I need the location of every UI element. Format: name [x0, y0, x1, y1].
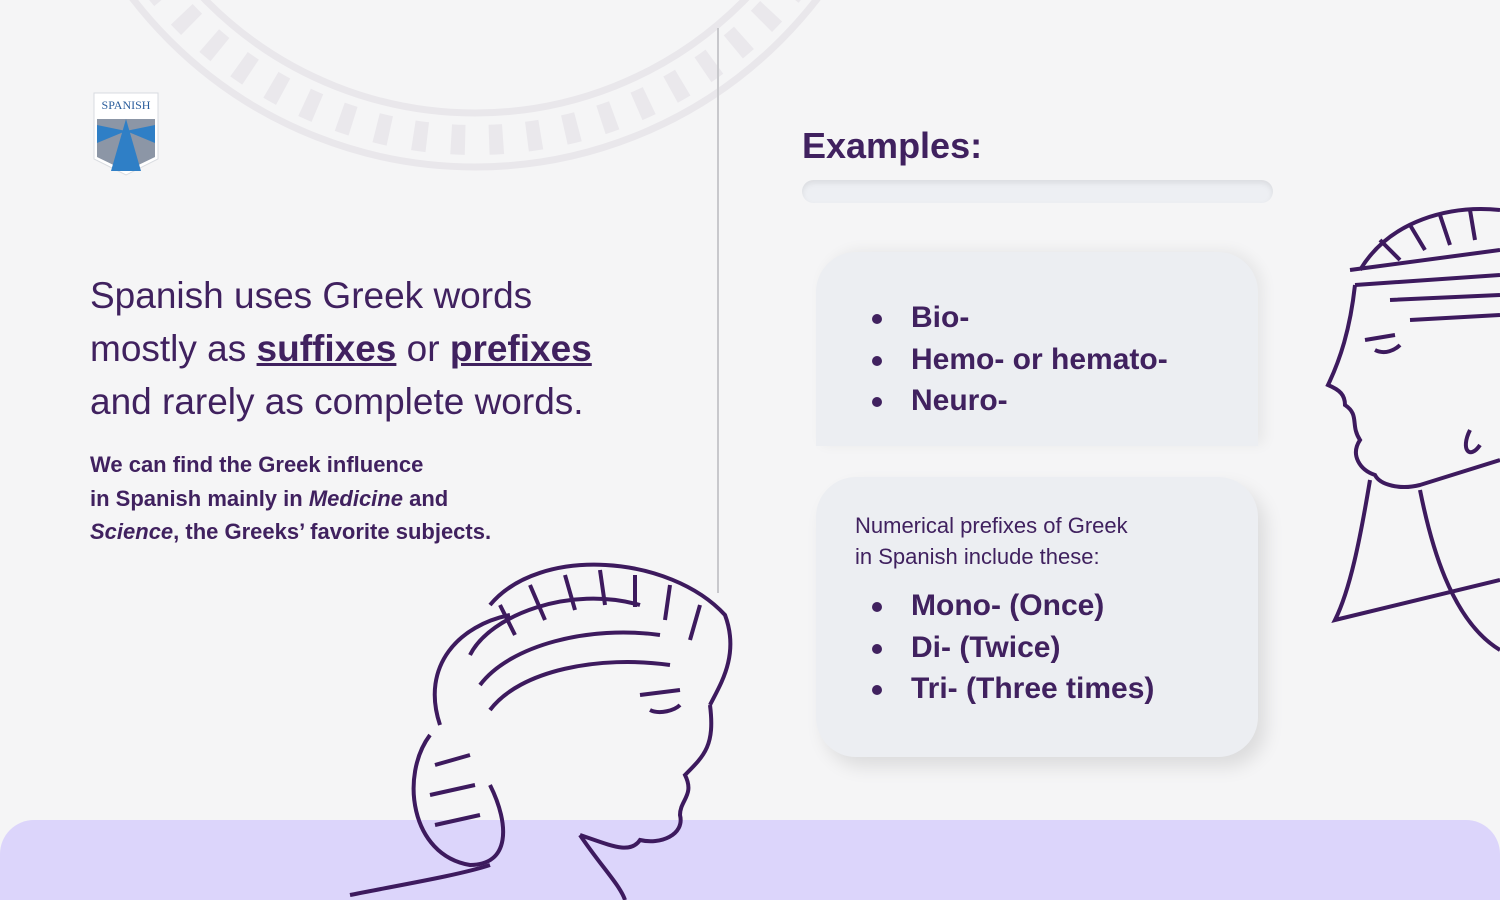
card: numerical prefixes: [816, 477, 1258, 757]
illustration: bust bottom: [350, 562, 732, 900]
main heading: mostly as suffixes or prefixes: [90, 328, 592, 369]
main heading: [90, 275, 592, 422]
card: examples list: Neuro-: [911, 384, 1008, 417]
subtext: We can find the Greek influence: [90, 452, 423, 477]
card: examples list: Hemo- or hemato-: [911, 342, 1168, 376]
logo: SPANISH: [102, 98, 151, 112]
main heading: Spanish uses Greek words: [90, 275, 532, 316]
logo: [94, 92, 158, 176]
card: numerical prefixes: Mono- (Once): [911, 589, 1104, 622]
card: examples list: [816, 252, 1258, 446]
main heading: and rarely as complete words.: [90, 381, 584, 422]
illustration: bust right: [1325, 207, 1500, 652]
examples heading: Examples:: [802, 125, 982, 166]
subtext: in Spanish mainly in Medicine and: [90, 486, 448, 510]
subtext: Science, the Greeks’ favorite subjects.: [90, 519, 491, 544]
card: numerical prefixes: in Spanish include these:: [855, 544, 1100, 569]
bar: [802, 180, 1273, 203]
divider line: [717, 28, 719, 593]
subtext: [90, 452, 491, 544]
card: examples list: Bio-: [911, 301, 969, 334]
bottom lavender band: [0, 820, 1500, 900]
card: numerical prefixes: Numerical prefixes of Greek: [855, 513, 1128, 538]
card: numerical prefixes: Tri- (Three times): [911, 672, 1154, 705]
card: numerical prefixes: Di- (Twice): [911, 630, 1060, 664]
